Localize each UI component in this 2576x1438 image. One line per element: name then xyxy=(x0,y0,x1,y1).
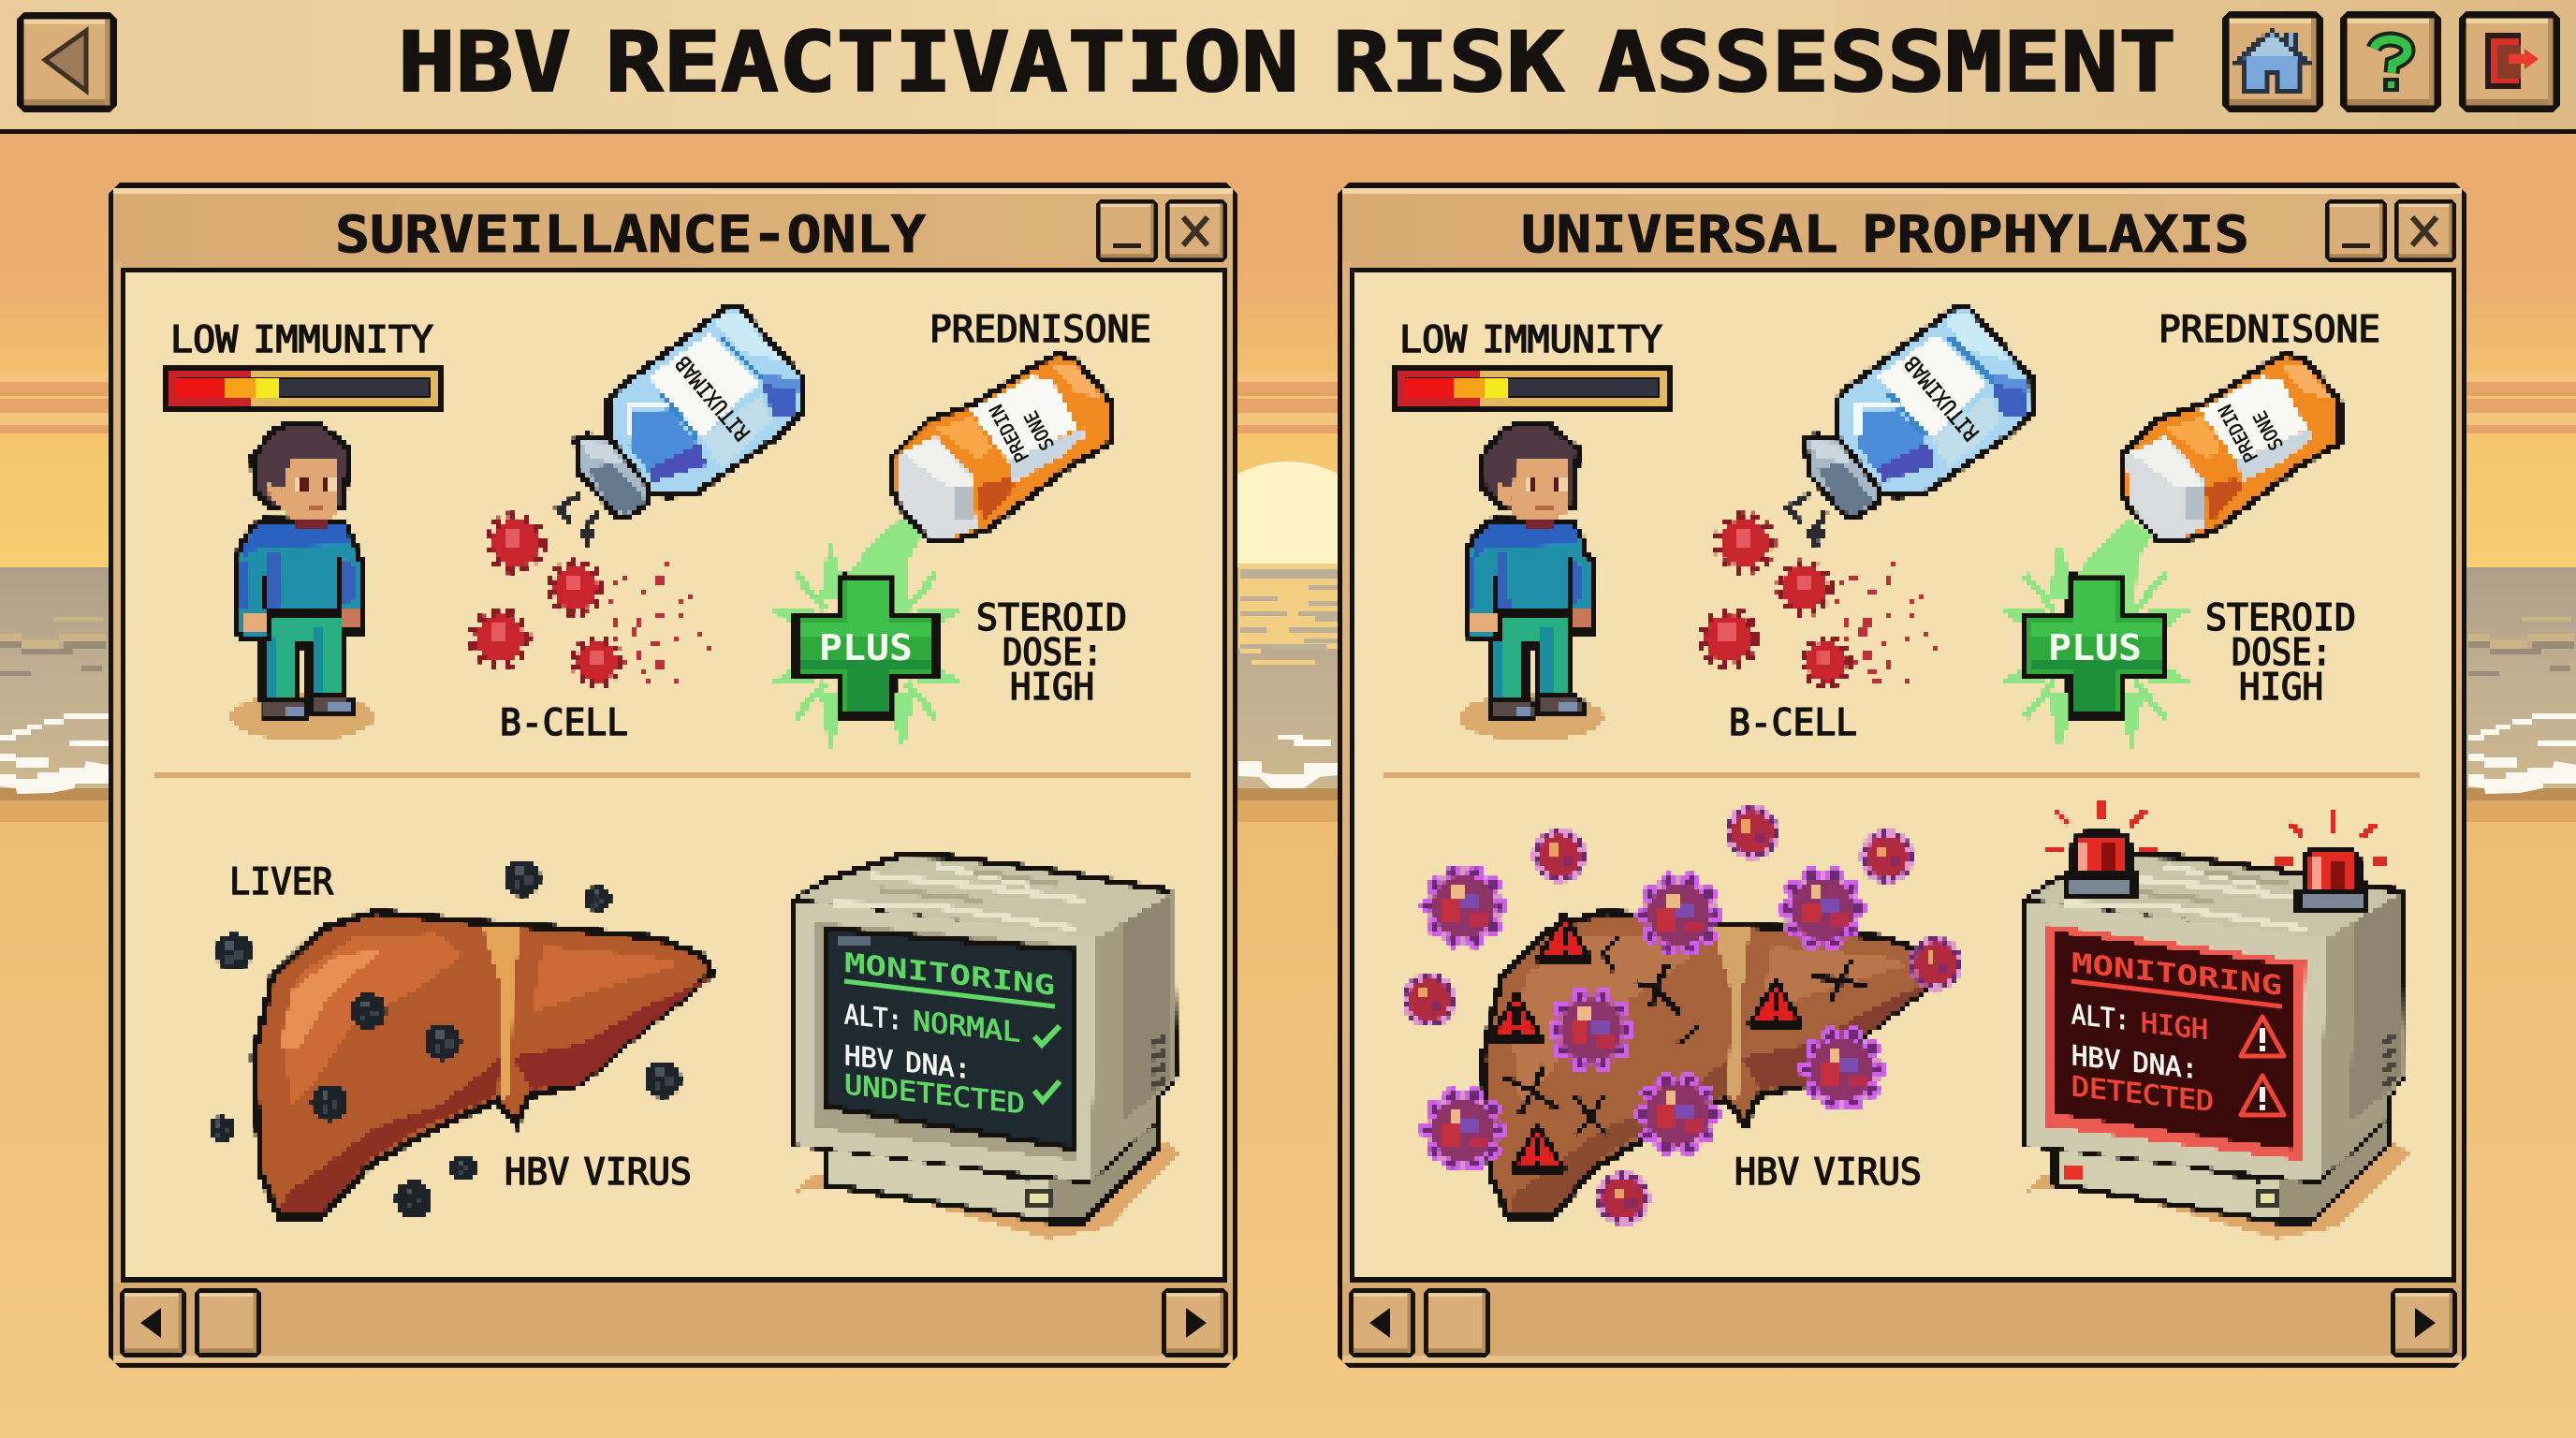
window frame xyxy=(109,183,1237,1368)
monitor: alarm results: DETECTED xyxy=(2071,1070,2214,1118)
panel heading: SURVEILLANCE-ONLY xyxy=(335,205,927,264)
steroid dose label: HIGH xyxy=(2239,667,2323,709)
steroid dose label: DOSE: xyxy=(1003,632,1103,674)
rituximab vial: RITUXIMAB xyxy=(1900,351,1984,445)
prednisone bottle: PREDNISONE xyxy=(929,309,1151,351)
panel heading: UNIVERSAL PROPHYLAXIS xyxy=(1521,205,2249,264)
green plus icon: PLUS xyxy=(2048,627,2142,668)
panel: surveillance-only xyxy=(109,183,1237,1368)
monitor: normal results: NORMAL xyxy=(913,1005,1020,1049)
icon: home button xyxy=(2222,11,2323,112)
monitor: normal results: ALT: xyxy=(844,998,902,1036)
damaged liver with active virus: HBV VIRUS xyxy=(1734,1152,1922,1194)
steroid dose label: DOSE: xyxy=(2232,632,2332,674)
monitor: normal results: MONITORING xyxy=(844,946,1055,1002)
prednisone bottle: SONE xyxy=(2248,407,2288,454)
prednisone bottle xyxy=(892,309,1151,540)
rituximab vial xyxy=(1788,307,2032,546)
healthy liver with dormant virus xyxy=(209,859,712,1218)
low immunity meter xyxy=(1392,319,1673,412)
icon: exit button xyxy=(2459,11,2560,112)
rituximab vial: RITUXIMAB xyxy=(671,351,755,445)
steroid dose label xyxy=(2205,597,2356,709)
b-cells dissolving: B-CELL xyxy=(500,702,628,744)
damaged liver with active virus xyxy=(1402,805,1963,1225)
low immunity meter: LOW IMMUNITY xyxy=(1399,319,1662,361)
patient figure xyxy=(1459,425,1603,741)
prednisone bottle xyxy=(2121,309,2380,540)
steroid dose label xyxy=(976,597,1127,709)
monitor: alarm results: ALT: xyxy=(2071,998,2130,1036)
b-cells dissolving xyxy=(473,516,710,744)
main title: HBV REACTIVATION RISK ASSESSMENT xyxy=(398,14,2176,110)
window frame xyxy=(1338,183,2466,1368)
header bar xyxy=(0,0,2576,134)
green plus icon xyxy=(1996,518,2194,751)
monitor: normal results xyxy=(796,855,1179,1239)
monitor: alarm results: MONITORING xyxy=(2071,946,2282,1002)
b-cells dissolving: B-CELL xyxy=(1729,702,1857,744)
healthy liver with dormant virus: LIVER xyxy=(229,861,333,903)
monitor: alarm results xyxy=(2025,800,2408,1239)
panel: universal prophylaxis xyxy=(1338,183,2466,1368)
healthy liver with dormant virus: HBV VIRUS xyxy=(505,1152,692,1194)
steroid dose label: HIGH xyxy=(1010,667,1094,709)
monitor: normal results: UNDETECTED xyxy=(844,1068,1025,1120)
prednisone bottle: PREDNISONE xyxy=(2159,309,2380,351)
green plus icon: PLUS xyxy=(819,627,913,668)
steroid dose label: STEROID xyxy=(2205,597,2356,639)
prednisone bottle: SONE xyxy=(1019,407,1059,454)
monitor: alarm results: HIGH xyxy=(2141,1006,2208,1046)
patient figure xyxy=(230,425,374,741)
back button xyxy=(17,12,117,112)
low immunity meter xyxy=(163,319,444,412)
b-cells dissolving xyxy=(1702,516,1939,744)
monitor: alarm results: HBV DNA: xyxy=(2071,1039,2198,1085)
prednisone bottle: PREDIN xyxy=(2214,401,2262,466)
green plus icon xyxy=(767,518,965,751)
monitor: normal results: HBV DNA: xyxy=(844,1039,971,1085)
rituximab vial xyxy=(559,307,803,546)
steroid dose label: STEROID xyxy=(976,597,1127,639)
icon: help button xyxy=(2340,11,2441,112)
low immunity meter: LOW IMMUNITY xyxy=(170,319,433,361)
prednisone bottle: PREDIN xyxy=(985,401,1033,466)
